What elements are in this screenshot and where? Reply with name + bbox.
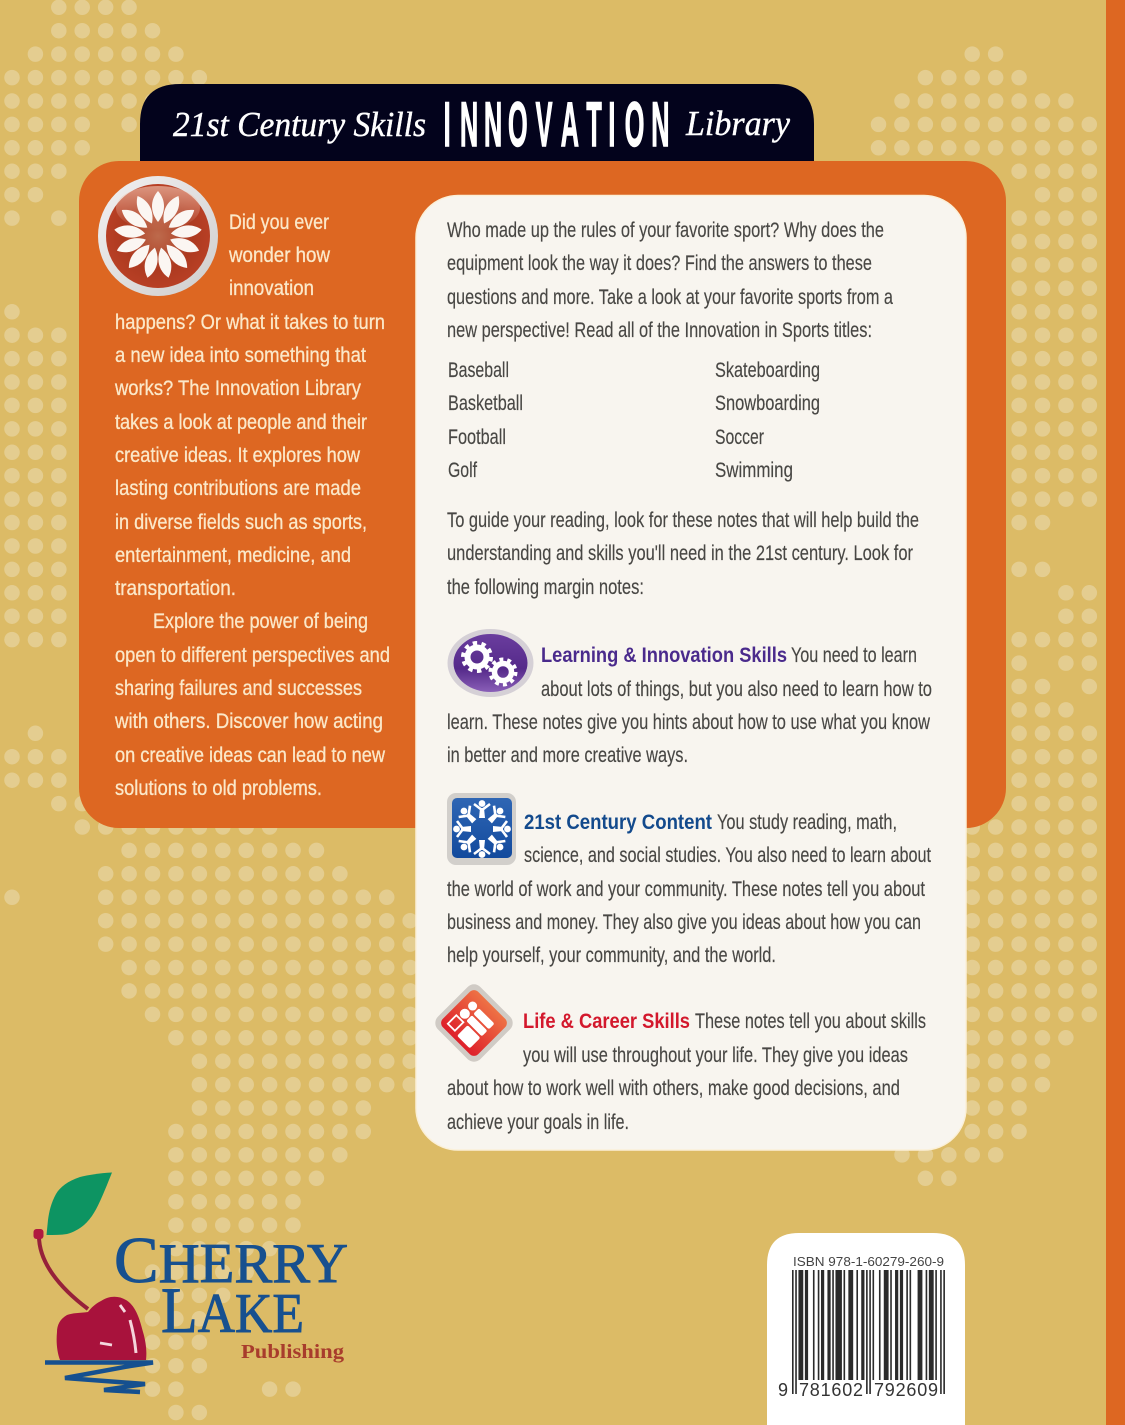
text block: innovation library introduction: sharing failures and successes [115,677,362,700]
text block: sports intro paragraph: Who made up the rules of your favorite sport? Why does the [447,219,884,242]
text block: life and career skills note: about how to work well with others, make good decisions, and [447,1077,900,1100]
text block: innovation library introduction: works? The Innovation Library [114,377,361,400]
text block: innovation library introduction: entertainment, medicine, and [115,544,351,567]
text block: sports intro paragraph: equipment look the way it does? Find the answers to these [447,252,872,275]
panel: isbn and barcode [767,1233,965,1425]
text block: innovation library introduction: Explore the power of being [153,610,368,633]
text block: learning and innovation skills note: in better and more creative ways. [447,744,688,767]
text block: innovation library introduction: a new idea into something that [115,344,366,367]
text block: life and career skills note: you will use throughout your life. They give you ideas [523,1044,908,1067]
text block: 21st century content note: 21st Century Content [524,811,712,834]
list: innovation in sports titles: Baseball [448,359,509,382]
list: innovation in sports titles [448,359,820,482]
text block: learning and innovation skills note: Learning & Innovation Skills [541,644,787,667]
text block: reading guide paragraph [447,509,919,599]
text block: life and career skills note: achieve your goals in life. [447,1111,629,1134]
text block: innovation library introduction: takes a look at people and their [115,411,367,434]
text block: innovation library introduction: in diverse fields such as sports, [115,511,367,534]
text block: innovation library introduction: with others. Discover how acting [114,710,383,733]
barcode bars [792,1270,945,1394]
text block: innovation library introduction: innovation [229,277,314,300]
text block: innovation library introduction: open to different perspectives and [115,644,390,667]
text block: innovation library introduction: creative ideas. It explores how [115,444,361,467]
text block: sports intro paragraph: new perspective! Read all of the Innovation in Sports titles: [447,319,872,342]
text block: 21st century content note: science, and social studies. You also need to learn about [524,844,931,867]
text block: learning and innovation skills note: about lots of things, but you also need to learn how to [541,678,932,701]
right edge orange bar [1106,0,1125,1425]
text block: innovation library introduction: solutions to old problems. [115,777,322,800]
icon: purple gears [448,629,534,697]
text block: innovation library introduction: wonder how [228,244,331,267]
icon: blue community ring [447,793,516,865]
list: innovation in sports titles: Swimming [715,459,793,482]
barcode digits: 9 [778,1380,788,1400]
barcode digits [778,1380,938,1400]
panel: white sports content panel [416,196,966,1150]
text block: reading guide paragraph: understanding and skills you'll need in the 21st century. Look for [447,542,913,565]
logo: cherry lake publishing [34,1172,348,1392]
series title banner: INNOVATION [444,91,669,160]
list: innovation in sports titles: Golf [448,459,477,482]
list: innovation in sports titles: Skateboarding [715,359,820,382]
wordmark: cherry: CHERRY [114,1224,348,1297]
panel: orange introduction panel [79,161,1006,828]
isbn label: ISBN 978-1-60279-260-9 [793,1255,944,1269]
text block: sports intro paragraph: questions and more. Take a look at your favorite sports from a [447,286,893,309]
series title banner: Library [685,104,790,143]
text block: innovation library introduction: happens? Or what it takes to turn [115,311,385,334]
list: innovation in sports titles: Soccer [715,426,764,449]
icon: red diamond with hands and book [432,981,516,1065]
text block: reading guide paragraph: To guide your reading, look for these notes that will help build the [447,509,919,532]
wordmark: publishing: Publishing [241,1341,344,1363]
barcode digits: 792609 [874,1380,938,1400]
text block: innovation library introduction: lasting contributions are made [115,477,361,500]
icon: cherry with leaf and water [34,1172,153,1392]
text block: learning and innovation skills note: You need to learn [791,644,917,667]
list: innovation in sports titles: Basketball [448,392,523,415]
series title banner: 21st Century Skills [173,105,426,144]
text block: innovation library introduction [114,211,390,800]
icon: innovation flower badge [98,176,218,296]
text block: sports intro paragraph [447,219,893,342]
text block: life and career skills note: These notes tell you about skills [695,1010,926,1033]
text block: innovation library introduction: on creative ideas can lead to new [115,744,386,767]
text block: innovation library introduction: Did you ever [229,211,329,234]
wordmark: lake: LAKE [161,1275,304,1347]
text block: life and career skills note: Life & Career Skills [523,1010,690,1033]
text block: 21st century content note: help yourself, your community, and the world. [447,944,776,967]
text block: 21st century content note: You study reading, math, [717,811,897,834]
text block: 21st century content note: the world of work and your community. These notes tell you about [447,878,925,901]
text block: learning and innovation skills note: learn. These notes give you hints about how to use what you know [447,711,931,734]
text block: 21st century content note [447,811,931,967]
series title banner [140,84,814,161]
list: innovation in sports titles: Football [448,426,506,449]
text block: learning and innovation skills note [447,644,932,767]
text block: 21st century content note: business and money. They also give you ideas about how you can [447,911,921,934]
barcode digits: 781602 [799,1380,863,1400]
text block: reading guide paragraph: the following margin notes: [447,576,644,599]
list: innovation in sports titles: Snowboarding [715,392,820,415]
text block: innovation library introduction: transportation. [115,577,236,600]
text block: life and career skills note [447,1010,926,1134]
